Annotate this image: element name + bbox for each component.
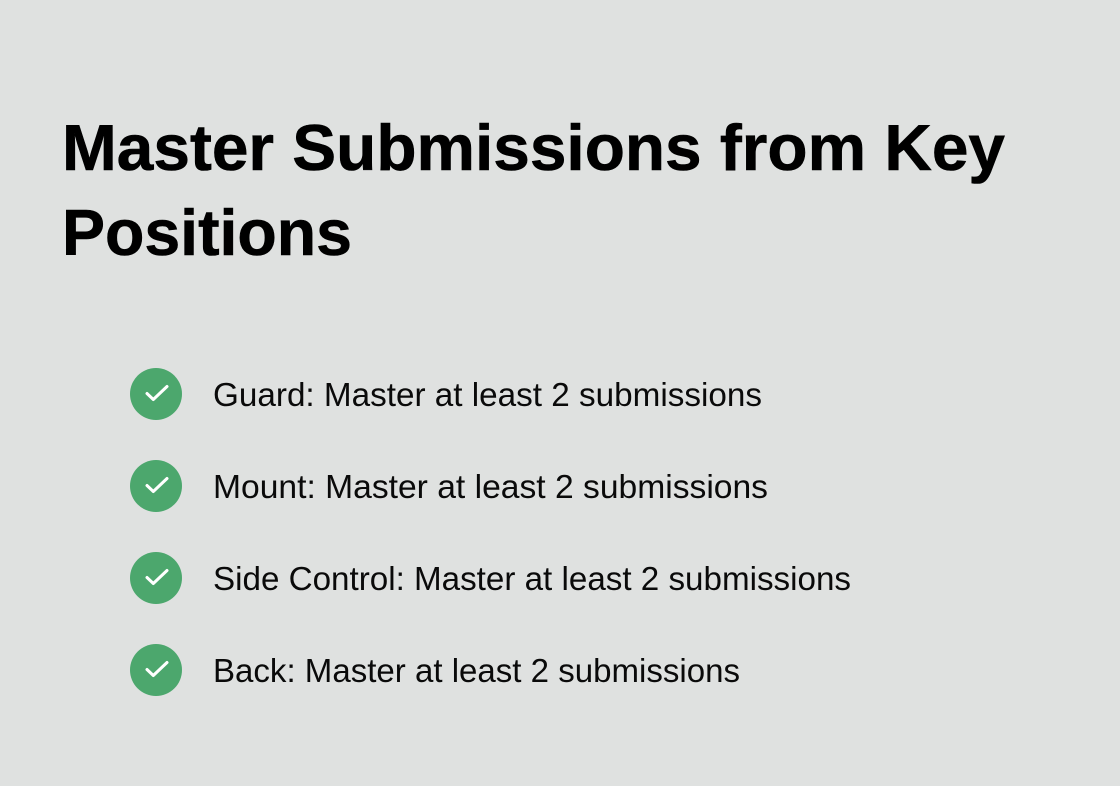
item: mount: Mount: Master at least 2 submissions: [213, 468, 768, 505]
item: mount: [130, 460, 768, 512]
item: back: Back: Master at least 2 submissions: [213, 652, 740, 689]
item: back: [130, 644, 740, 696]
title: Master Submissions from Key: [62, 111, 1005, 184]
item: side control: [130, 552, 851, 604]
checklist: [130, 368, 851, 696]
item: guard: Guard: Master at least 2 submissions: [213, 376, 762, 413]
title: [62, 111, 1005, 269]
item: side control: Side Control: Master at least 2 submissions: [213, 560, 851, 597]
title: Positions: [62, 196, 352, 269]
item: guard: [130, 368, 762, 420]
